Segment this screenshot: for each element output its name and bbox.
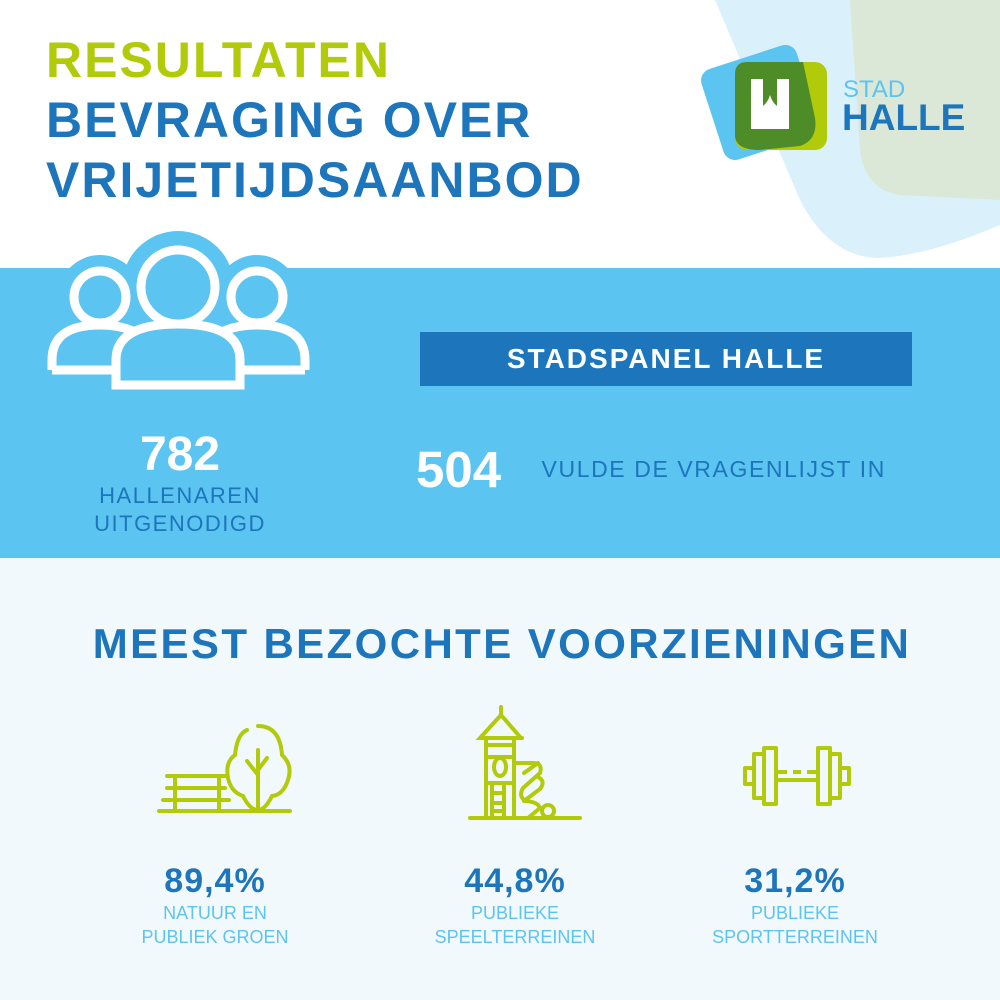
stat: sportterreinen: 31,2%	[744, 862, 846, 900]
stat: speelterreinen	[435, 862, 595, 947]
logo	[701, 45, 965, 160]
logo: HALLE	[842, 97, 965, 138]
title	[46, 32, 584, 208]
stat: sportterreinen: SPORTTERREINEN	[712, 927, 878, 947]
title: VRIJETIJDSAANBOD	[46, 152, 584, 208]
stat: speelterreinen: SPEELTERREINEN	[435, 927, 595, 947]
icon: bench and tree	[157, 724, 292, 813]
title: BEVRAGING OVER	[46, 92, 532, 148]
stat: 782: HALLENAREN	[99, 483, 261, 508]
logo: STAD	[843, 76, 905, 103]
banner: stadspanel	[420, 332, 912, 386]
stat: natuur: PUBLIEK GROEN	[141, 927, 289, 947]
stat: 504: 504 VULDE DE VRAGENLIJST IN	[416, 441, 886, 498]
stat: 782: 782	[140, 428, 220, 481]
stat: natuur: NATUUR EN	[163, 903, 267, 923]
stat: sportterreinen: PUBLIEKE	[751, 903, 839, 923]
background shapes	[715, 0, 1000, 258]
heading: meest bezochte: MEEST BEZOCHTE VOORZIENINGEN	[93, 620, 911, 667]
stat: natuur: 89,4%	[164, 862, 266, 900]
stat: sportterreinen	[712, 862, 878, 947]
bottom background	[0, 558, 1000, 1000]
title: RESULTATEN	[46, 32, 391, 88]
stat: speelterreinen: PUBLIEKE	[471, 903, 559, 923]
banner: stadspanel: STADSPANEL HALLE	[507, 343, 825, 374]
blue band	[0, 268, 1000, 558]
icon: playground	[468, 705, 582, 820]
stat: 782: UITGENODIGD	[94, 511, 266, 536]
icon: dumbbell	[743, 746, 851, 806]
icon: people	[48, 231, 310, 390]
stat: 782	[94, 428, 266, 536]
stat: speelterreinen: 44,8%	[464, 862, 566, 900]
stat: natuur	[141, 862, 289, 947]
